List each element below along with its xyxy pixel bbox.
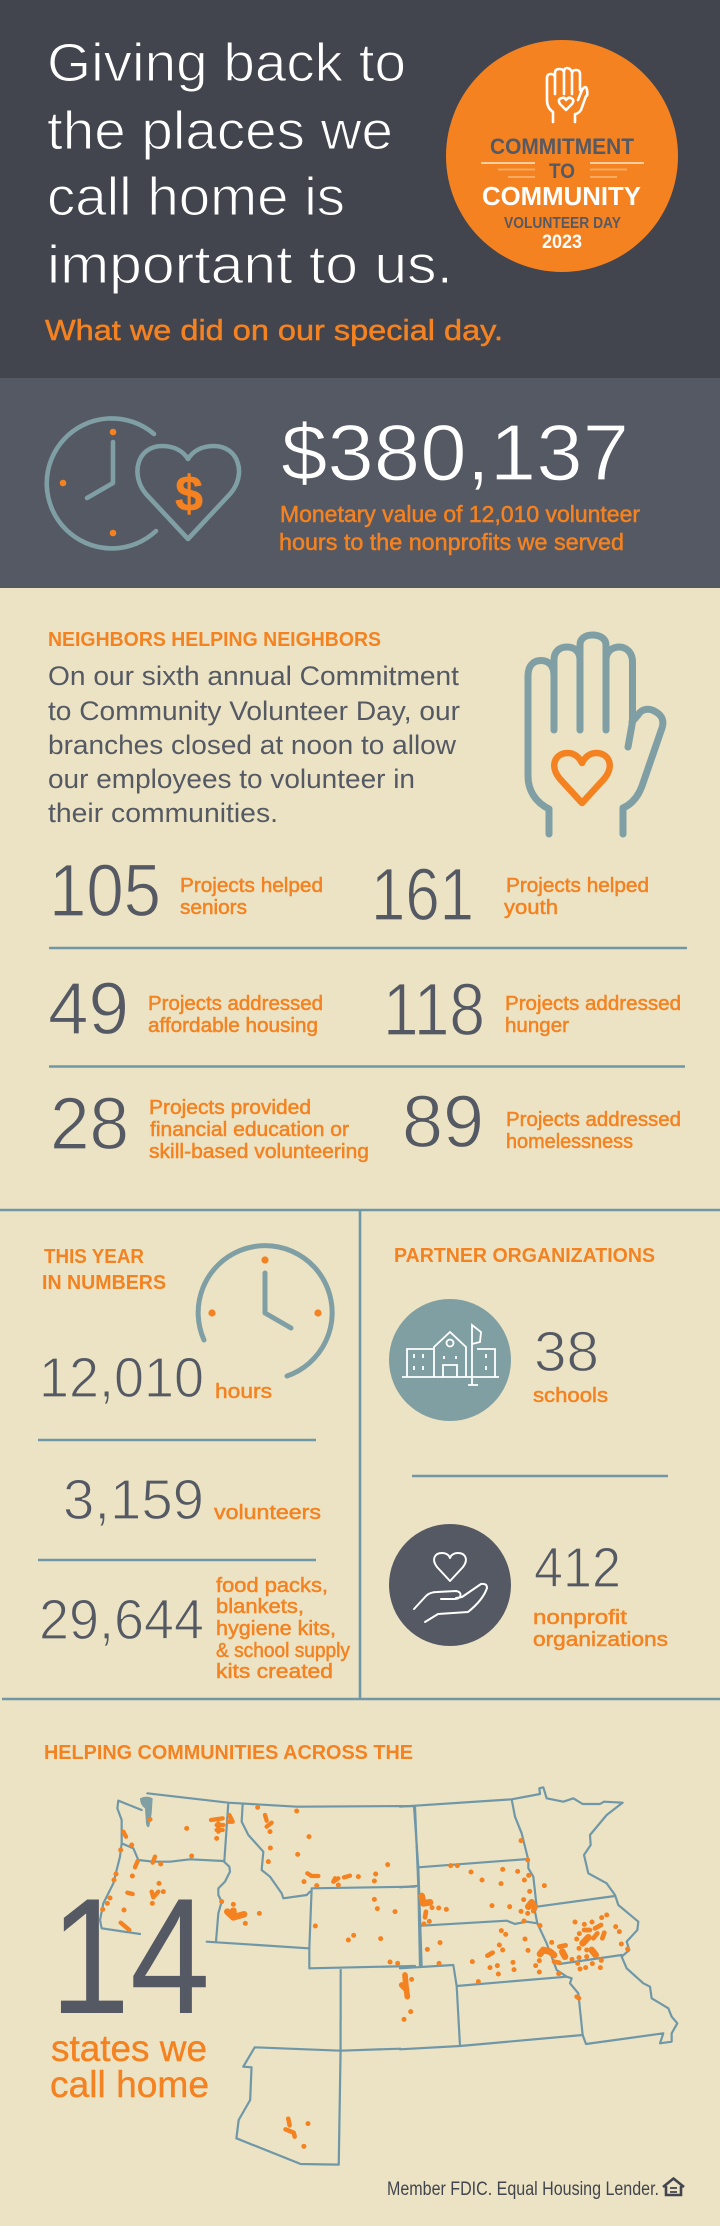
panel: this year in numbers bbox=[38, 1246, 350, 1683]
heading: NEIGHBORS HELPING NEIGHBORS bbox=[48, 629, 381, 651]
stat: kits: food packs, bbox=[216, 1575, 328, 1597]
stat: 105 seniors: 105 bbox=[49, 849, 161, 932]
stat: 49 affordable housing: Projects addressed bbox=[148, 993, 323, 1015]
title: Giving back to bbox=[47, 33, 406, 93]
legal text: Member FDIC. Equal Housing Lender. bbox=[387, 2179, 659, 2200]
stat: kits bbox=[39, 1575, 350, 1683]
stat: 89 homelessness bbox=[402, 1080, 681, 1163]
stat: 28 financial education bbox=[50, 1082, 369, 1165]
map: 14 states bbox=[100, 1787, 677, 2165]
stat: 161 youth bbox=[371, 853, 649, 936]
stat: 28 financial education: Projects provided bbox=[149, 1097, 311, 1119]
panel: helping communities bbox=[44, 1742, 677, 2165]
states caption bbox=[50, 2028, 209, 2105]
stat: schools bbox=[533, 1320, 608, 1407]
panel: header bbox=[0, 0, 720, 378]
stat: kits: kits created bbox=[216, 1661, 333, 1683]
badge text: COMMITMENT bbox=[490, 134, 635, 159]
subtitle: What we did on our special day. bbox=[45, 315, 503, 347]
stat: nonprofits: organizations bbox=[533, 1629, 668, 1651]
stat: 28 financial education: skill-based volunteering bbox=[149, 1141, 369, 1163]
value description: hours to the nonprofits we served bbox=[279, 529, 624, 555]
stat: volunteers: 3,159 bbox=[63, 1468, 204, 1532]
stat: hours: 12,010 bbox=[39, 1346, 204, 1410]
panel: monetary value bbox=[0, 378, 720, 588]
icon: hand with heart bbox=[528, 635, 663, 834]
panel: partner organizations bbox=[389, 1245, 668, 1651]
stat: 161 youth: youth bbox=[504, 897, 558, 919]
icon: clock and heart bbox=[47, 418, 239, 548]
map: eastern states bbox=[400, 1787, 677, 2049]
map: arizona and southern border bbox=[236, 2020, 400, 2165]
value description: Monetary value of 12,010 volunteer bbox=[280, 501, 640, 527]
intro text: branches closed at noon to allow bbox=[48, 730, 457, 760]
footer bbox=[387, 2178, 684, 2200]
stat: 49 affordable housing bbox=[48, 967, 323, 1050]
states caption: states we bbox=[51, 2028, 207, 2069]
stat: kits: 29,644 bbox=[39, 1588, 204, 1652]
stat: 118 hunger bbox=[383, 968, 681, 1051]
icon: school bbox=[389, 1299, 511, 1421]
states caption: call home bbox=[50, 2064, 209, 2105]
intro text: On our sixth annual Commitment bbox=[48, 661, 460, 691]
stat: 49 affordable housing: affordable housing bbox=[148, 1015, 318, 1037]
stat: 105 seniors: Projects helped bbox=[180, 875, 323, 897]
intro text: our employees to volunteer in bbox=[48, 764, 415, 794]
stat: kits: hygiene kits, bbox=[216, 1618, 336, 1640]
stat: 28 financial education: financial education or bbox=[150, 1119, 349, 1141]
heading: THIS YEAR bbox=[44, 1246, 145, 1268]
badge: commitment to community: VOLUNTEER DAY bbox=[504, 215, 621, 232]
title: important to us. bbox=[47, 235, 453, 295]
icon: clock bbox=[198, 1246, 332, 1376]
stat: 49 affordable housing: 49 bbox=[48, 967, 129, 1050]
icon: equal housing bbox=[663, 2178, 684, 2195]
heading: PARTNER ORGANIZATIONS bbox=[394, 1245, 655, 1267]
stat: 118 hunger: hunger bbox=[505, 1015, 569, 1037]
stat: 28 financial education: 28 bbox=[50, 1082, 129, 1165]
badge: commitment to community: COMMUNITY bbox=[482, 181, 641, 211]
icon: hand holding heart bbox=[389, 1524, 511, 1646]
map: western states bbox=[100, 1793, 420, 2020]
stat: 105 seniors bbox=[49, 849, 323, 932]
stat: kits: & school supply bbox=[216, 1640, 350, 1662]
stat: volunteers: volunteers bbox=[214, 1502, 321, 1524]
icon: clock and heart: $ bbox=[175, 466, 203, 522]
stat: schools: 38 bbox=[534, 1320, 599, 1384]
stat: 89 homelessness: homelessness bbox=[506, 1131, 633, 1153]
badge: commitment to community: 2023 bbox=[542, 232, 582, 253]
title bbox=[47, 33, 453, 295]
stat: 105 seniors: seniors bbox=[180, 897, 247, 919]
badge: commitment to community bbox=[446, 40, 678, 272]
icon: badge hand bbox=[547, 68, 587, 122]
stat: 89 homelessness: 89 bbox=[402, 1080, 484, 1163]
stat: schools: schools bbox=[533, 1385, 608, 1407]
stat: volunteers bbox=[63, 1468, 321, 1532]
heading: IN NUMBERS bbox=[42, 1272, 166, 1294]
heading bbox=[42, 1246, 166, 1294]
stat: 118 hunger: 118 bbox=[383, 968, 485, 1051]
intro text: their communities. bbox=[48, 798, 278, 828]
panel: neighbors helping neighbors bbox=[48, 629, 687, 1165]
stat: 89 homelessness: Projects addressed bbox=[506, 1109, 681, 1131]
intro text bbox=[48, 661, 460, 828]
stat: hours: hours bbox=[215, 1381, 272, 1403]
title: call home is bbox=[47, 167, 345, 227]
heading: HELPING COMMUNITIES ACROSS THE bbox=[44, 1742, 413, 1764]
stat: kits: blankets, bbox=[216, 1596, 304, 1618]
stat: 161 youth: 161 bbox=[371, 853, 474, 936]
stat: 161 youth: Projects helped bbox=[506, 875, 649, 897]
stat: nonprofits bbox=[533, 1536, 668, 1651]
stat: nonprofits: 412 bbox=[534, 1536, 621, 1600]
states count: 14 bbox=[50, 1864, 210, 2048]
value description bbox=[279, 501, 640, 555]
intro text: to Community Volunteer Day, our bbox=[48, 696, 460, 726]
title: the places we bbox=[47, 101, 393, 161]
stat: 118 hunger: Projects addressed bbox=[505, 993, 681, 1015]
stat: nonprofits: nonprofit bbox=[533, 1607, 628, 1629]
badge: commitment to community: TO bbox=[549, 160, 575, 183]
dollar amount: $380,137 bbox=[281, 408, 629, 497]
